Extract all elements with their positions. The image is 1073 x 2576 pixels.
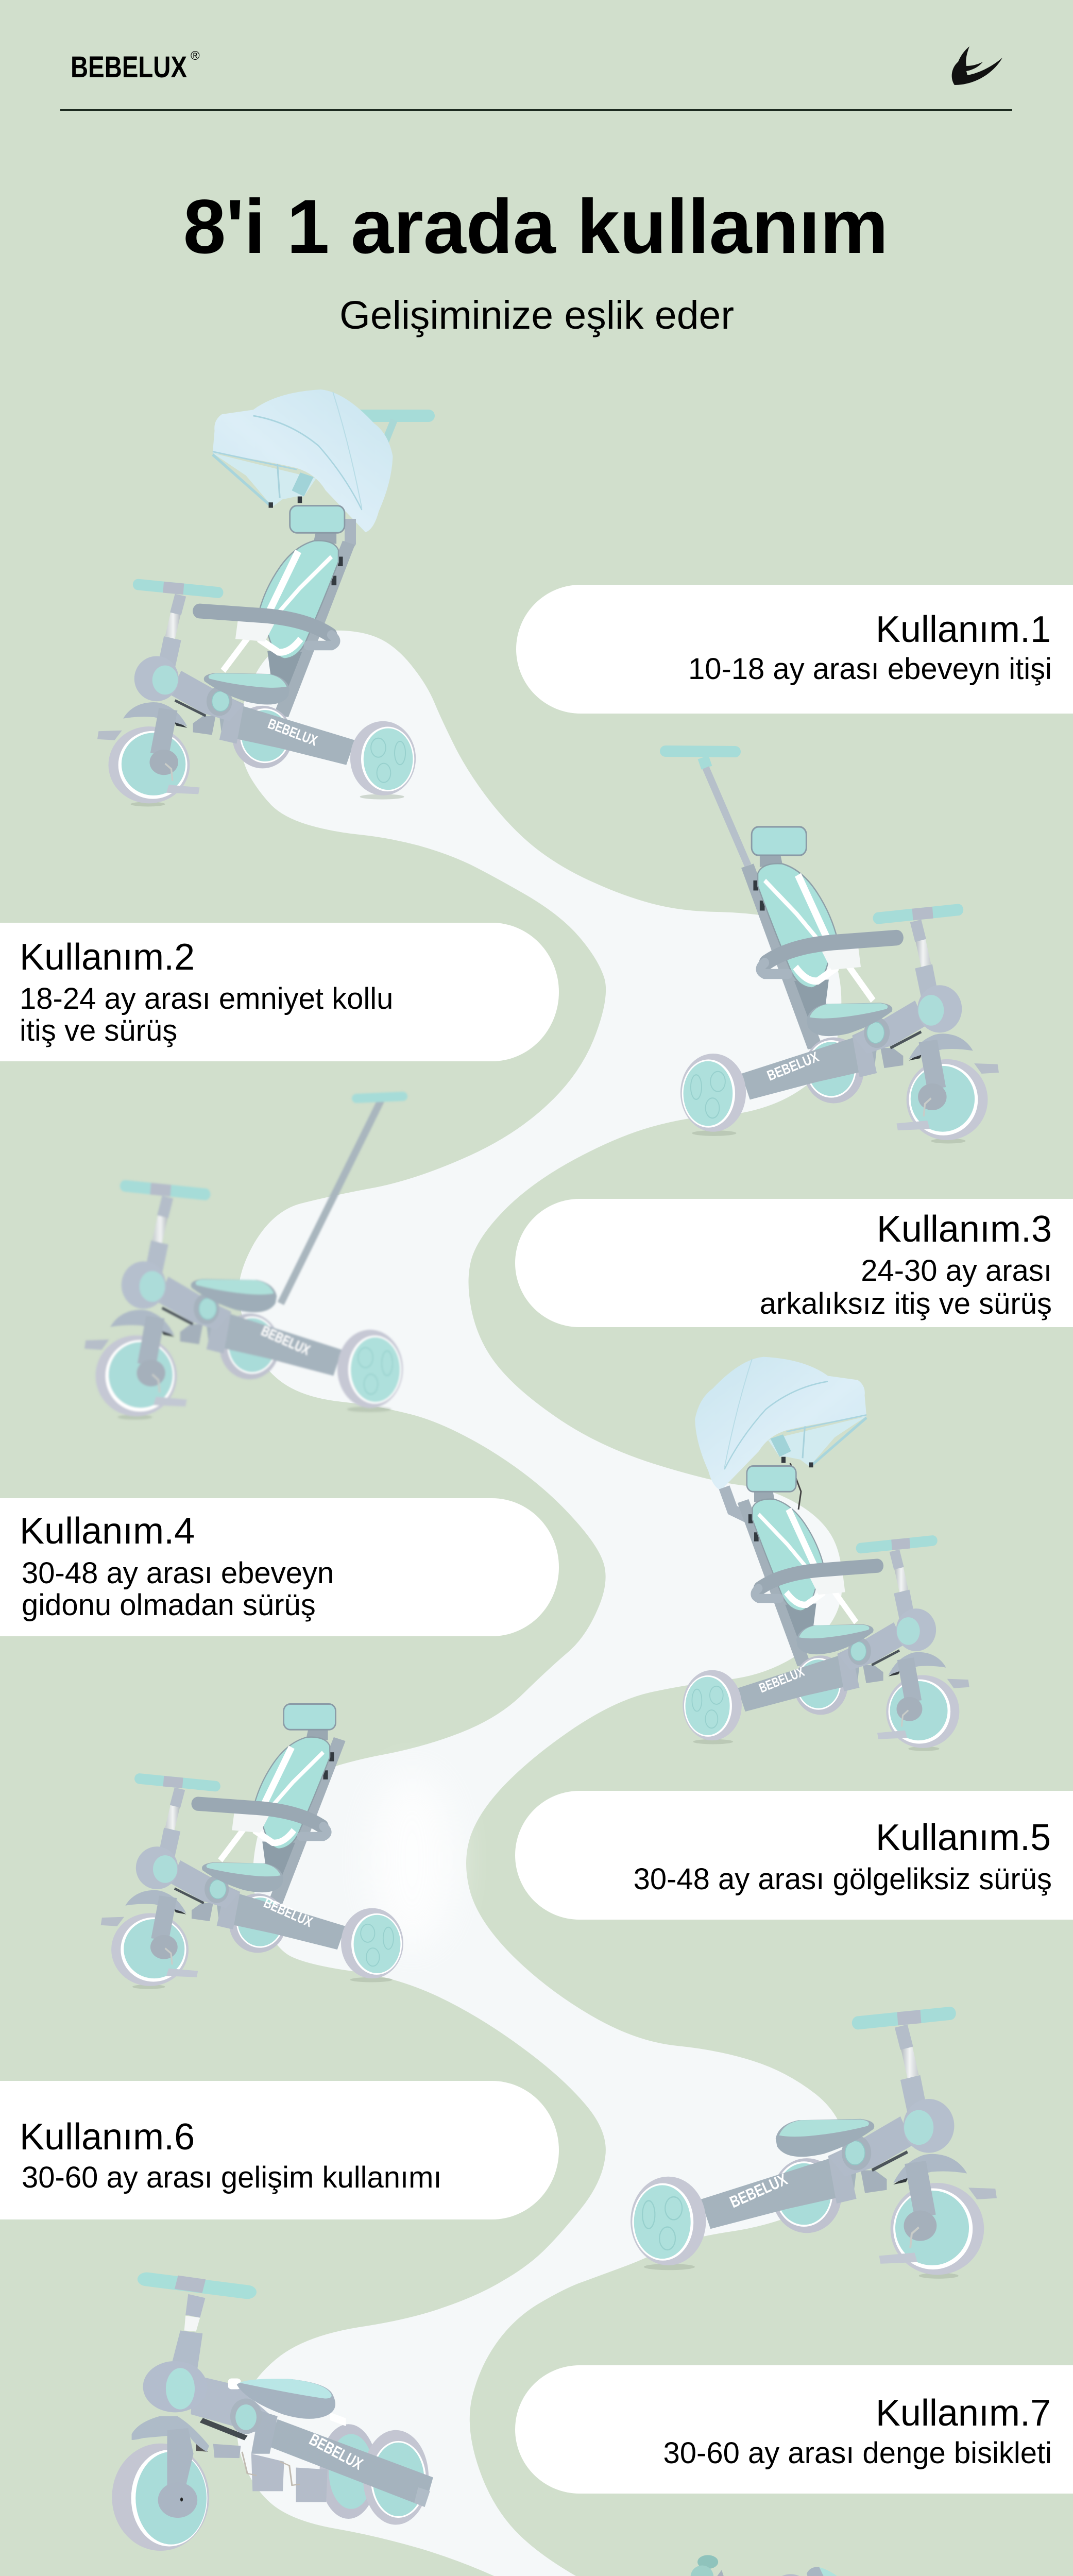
trike 8: folded storage — [691, 2555, 933, 2576]
trike 6: balance trike without backrest: BEBELUX — [727, 2170, 790, 2211]
trike 2: push handle and backrest: BEBELUX — [765, 1048, 821, 1084]
trike 1: canopy and push handle — [97, 389, 429, 807]
pill: usage 5: Kullanım.5 — [876, 1817, 1051, 1858]
pill: usage 7: Kullanım.7 — [876, 2393, 1051, 2434]
header — [60, 46, 1012, 111]
pill: usage 1 — [516, 585, 1073, 714]
pill: usage 1: Kullanım.1 — [876, 609, 1051, 650]
trike 3: push handle without backrest: BEBELUX — [259, 1323, 313, 1358]
pill: usage 4: gidonu olmadan sürüş — [22, 1588, 316, 1622]
bright spot on path — [371, 1772, 453, 1947]
trike 4: canopy without push handle — [683, 1357, 969, 1751]
pill: usage 3: Kullanım.3 — [877, 1209, 1052, 1250]
subtitle: Gelişiminize eşlik eder — [339, 293, 734, 337]
title: 8'i 1 arada kullanım — [183, 183, 888, 269]
pill: usage 7: 30-60 ay arası denge bisikleti — [663, 2436, 1052, 2470]
pill: usage 6 — [0, 2081, 559, 2219]
trike 3: push handle without backrest — [84, 1096, 403, 1420]
registered mark: ® — [191, 49, 200, 63]
pill: usage 4: Kullanım.4 — [20, 1511, 195, 1552]
pill: usage 2 — [0, 923, 559, 1061]
pill: usage 4: 30-48 ay arası ebeveyn — [22, 1556, 334, 1590]
pill: usage 6: Kullanım.6 — [20, 2116, 195, 2158]
pill: usage 2: 18-24 ay arası emniyet kollu — [20, 982, 393, 1015]
trike 2: push handle and backrest — [666, 751, 999, 1144]
trike 4: canopy without push handle: BEBELUX — [757, 1664, 807, 1696]
winding white path — [237, 631, 847, 2576]
pill: usage 3: arkalıksız itiş ve sürüş — [760, 1287, 1052, 1320]
pill: usage 3: 24-30 ay arası — [861, 1254, 1052, 1287]
pill: usage 2: Kullanım.2 — [20, 937, 195, 978]
pill: usage 5: 30-48 ay arası gölgeliksiz sürüş — [634, 1862, 1052, 1896]
trike 7: balance bike — [112, 2279, 433, 2551]
trike 1: canopy and push handle: BEBELUX — [266, 716, 320, 749]
pill: usage 7 — [515, 2365, 1073, 2494]
trike 6: balance trike without backrest — [631, 2013, 997, 2279]
trike 5: backrest without canopy — [101, 1704, 403, 1989]
pill: usage 4 — [0, 1498, 559, 1636]
trike 5: backrest without canopy: BEBELUX — [262, 1894, 315, 1930]
pill: usage 1: 10-18 ay arası ebeveyn itişi — [688, 652, 1052, 686]
brand name: BEBELUX — [71, 50, 187, 84]
pill: usage 6: 30-60 ay arası gelişim kullanımı — [22, 2161, 442, 2194]
trike 7: balance bike: BEBELUX — [306, 2430, 366, 2473]
pill: usage 2: itiş ve sürüş — [20, 1014, 177, 1047]
pill: usage 3 — [515, 1199, 1073, 1327]
pill: usage 5 — [515, 1791, 1073, 1920]
icon: swallow logo — [952, 46, 1002, 85]
